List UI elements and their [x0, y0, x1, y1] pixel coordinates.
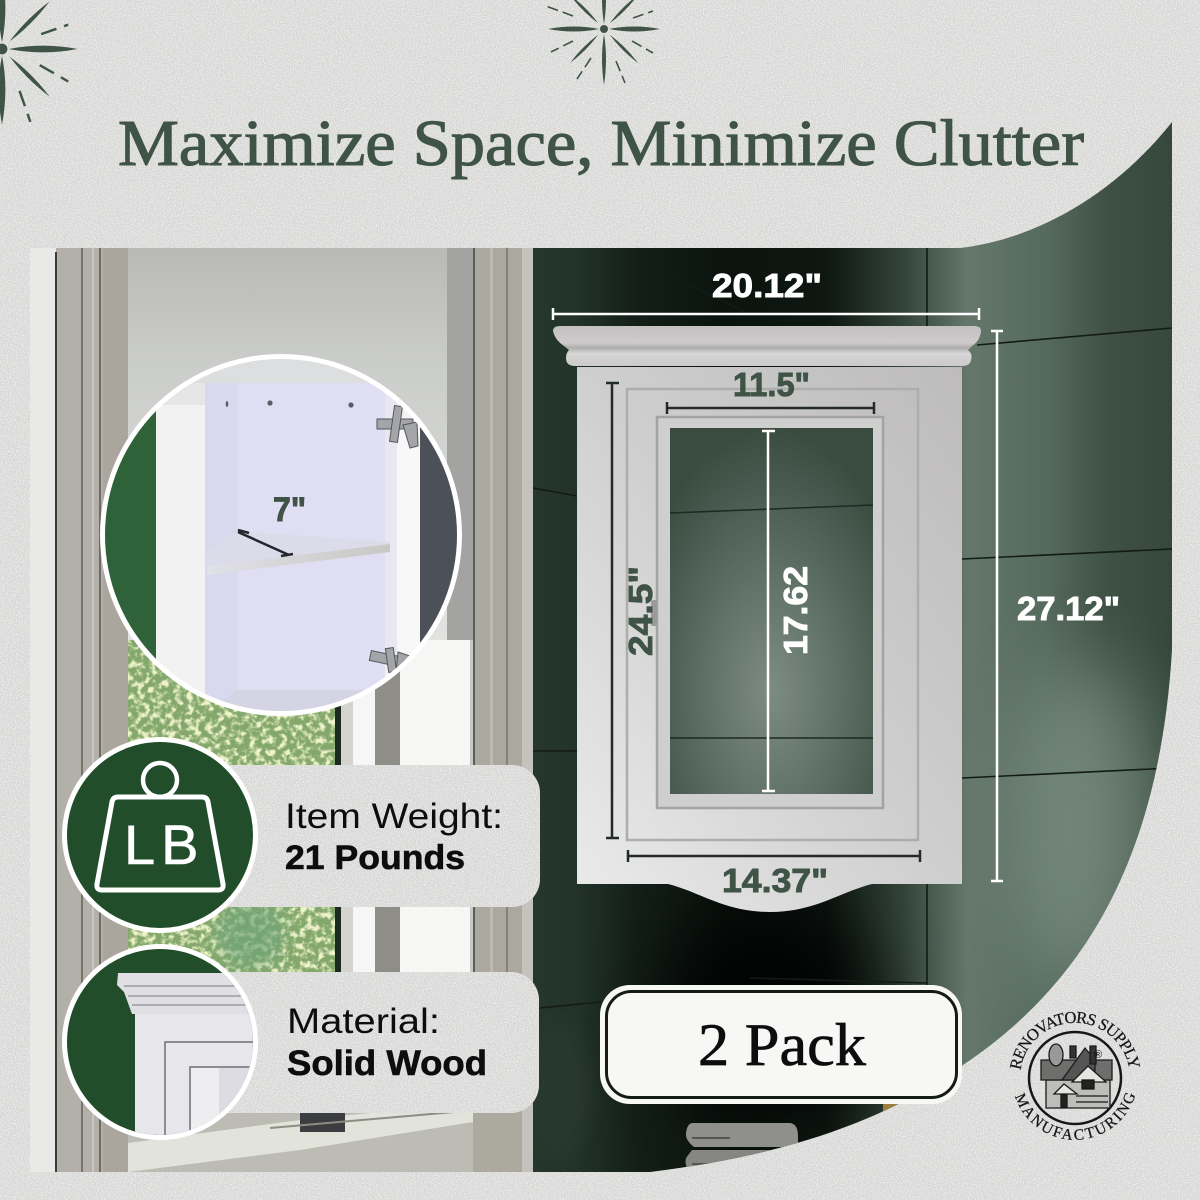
dim: door width — [628, 850, 920, 899]
logo arc text: RENOVATORS SUPPLY — [1010, 1012, 1140, 1070]
shelf depth line — [238, 530, 293, 556]
window frame — [657, 417, 883, 808]
door panel — [627, 389, 918, 840]
badge: 2 pack — [600, 985, 962, 1104]
dim: overall height: 27.12" — [1017, 590, 1120, 627]
dim: window width — [667, 366, 874, 414]
towels on shelf — [686, 1123, 798, 1167]
icon: weight LB circle: LB — [124, 813, 204, 876]
door knob — [651, 600, 657, 626]
crown molding — [553, 326, 981, 366]
cabinet body — [577, 367, 962, 912]
upper wall above window — [128, 248, 447, 640]
dim: overall height — [991, 331, 1120, 881]
shelf depth label: 7" — [273, 491, 306, 529]
cabinet with dimensions — [553, 267, 1120, 912]
shelf pin holes — [226, 400, 354, 408]
pill: material: Solid Wood — [287, 1044, 487, 1083]
dim: window width: 11.5" — [733, 366, 810, 403]
window sill — [128, 975, 473, 1172]
logo arc text — [1010, 1012, 1140, 1140]
registered mark: ® — [1094, 1049, 1102, 1061]
dark green curved wall — [530, 120, 1173, 1175]
dim: window height — [762, 431, 814, 791]
dim: door height — [606, 383, 659, 838]
decorative sparkle: center — [546, 0, 660, 85]
callout: material close-up circle — [60, 940, 262, 1144]
decorative sparkle: left — [0, 0, 78, 125]
icon: weight LB circle — [62, 737, 258, 933]
brass fixture — [883, 1104, 898, 1112]
pill: material: Material: — [287, 1002, 440, 1041]
pill: item weight — [200, 765, 540, 907]
badge: 2 pack: 2 Pack — [698, 1012, 866, 1078]
pill: material — [200, 972, 539, 1113]
upper hinge — [377, 406, 418, 448]
bottom panel — [222, 690, 364, 711]
callout: interior shelf circle — [100, 354, 465, 717]
photo: window and trim — [30, 248, 534, 1172]
lower hinge — [369, 648, 410, 674]
pill: item weight: Item Weight: — [285, 797, 503, 836]
dim: door height: 24.5" — [622, 566, 659, 656]
logo arc text: MANUFACTURING — [1014, 1092, 1135, 1140]
title: Maximize Space, Minimize Clutter — [118, 107, 1084, 180]
dim: window height: 17.62 — [777, 566, 814, 655]
dim: overall width: 20.12" — [712, 267, 822, 304]
dim: door width: 14.37" — [722, 862, 828, 899]
window foliage view — [128, 640, 340, 975]
shelf — [238, 532, 390, 562]
logo: Renovators Supply Manufacturing — [1010, 1012, 1140, 1140]
logo house — [1041, 1044, 1112, 1108]
glass pane — [670, 428, 873, 794]
pill: item weight: 21 Pounds — [285, 839, 465, 877]
dim: overall width — [553, 267, 979, 320]
